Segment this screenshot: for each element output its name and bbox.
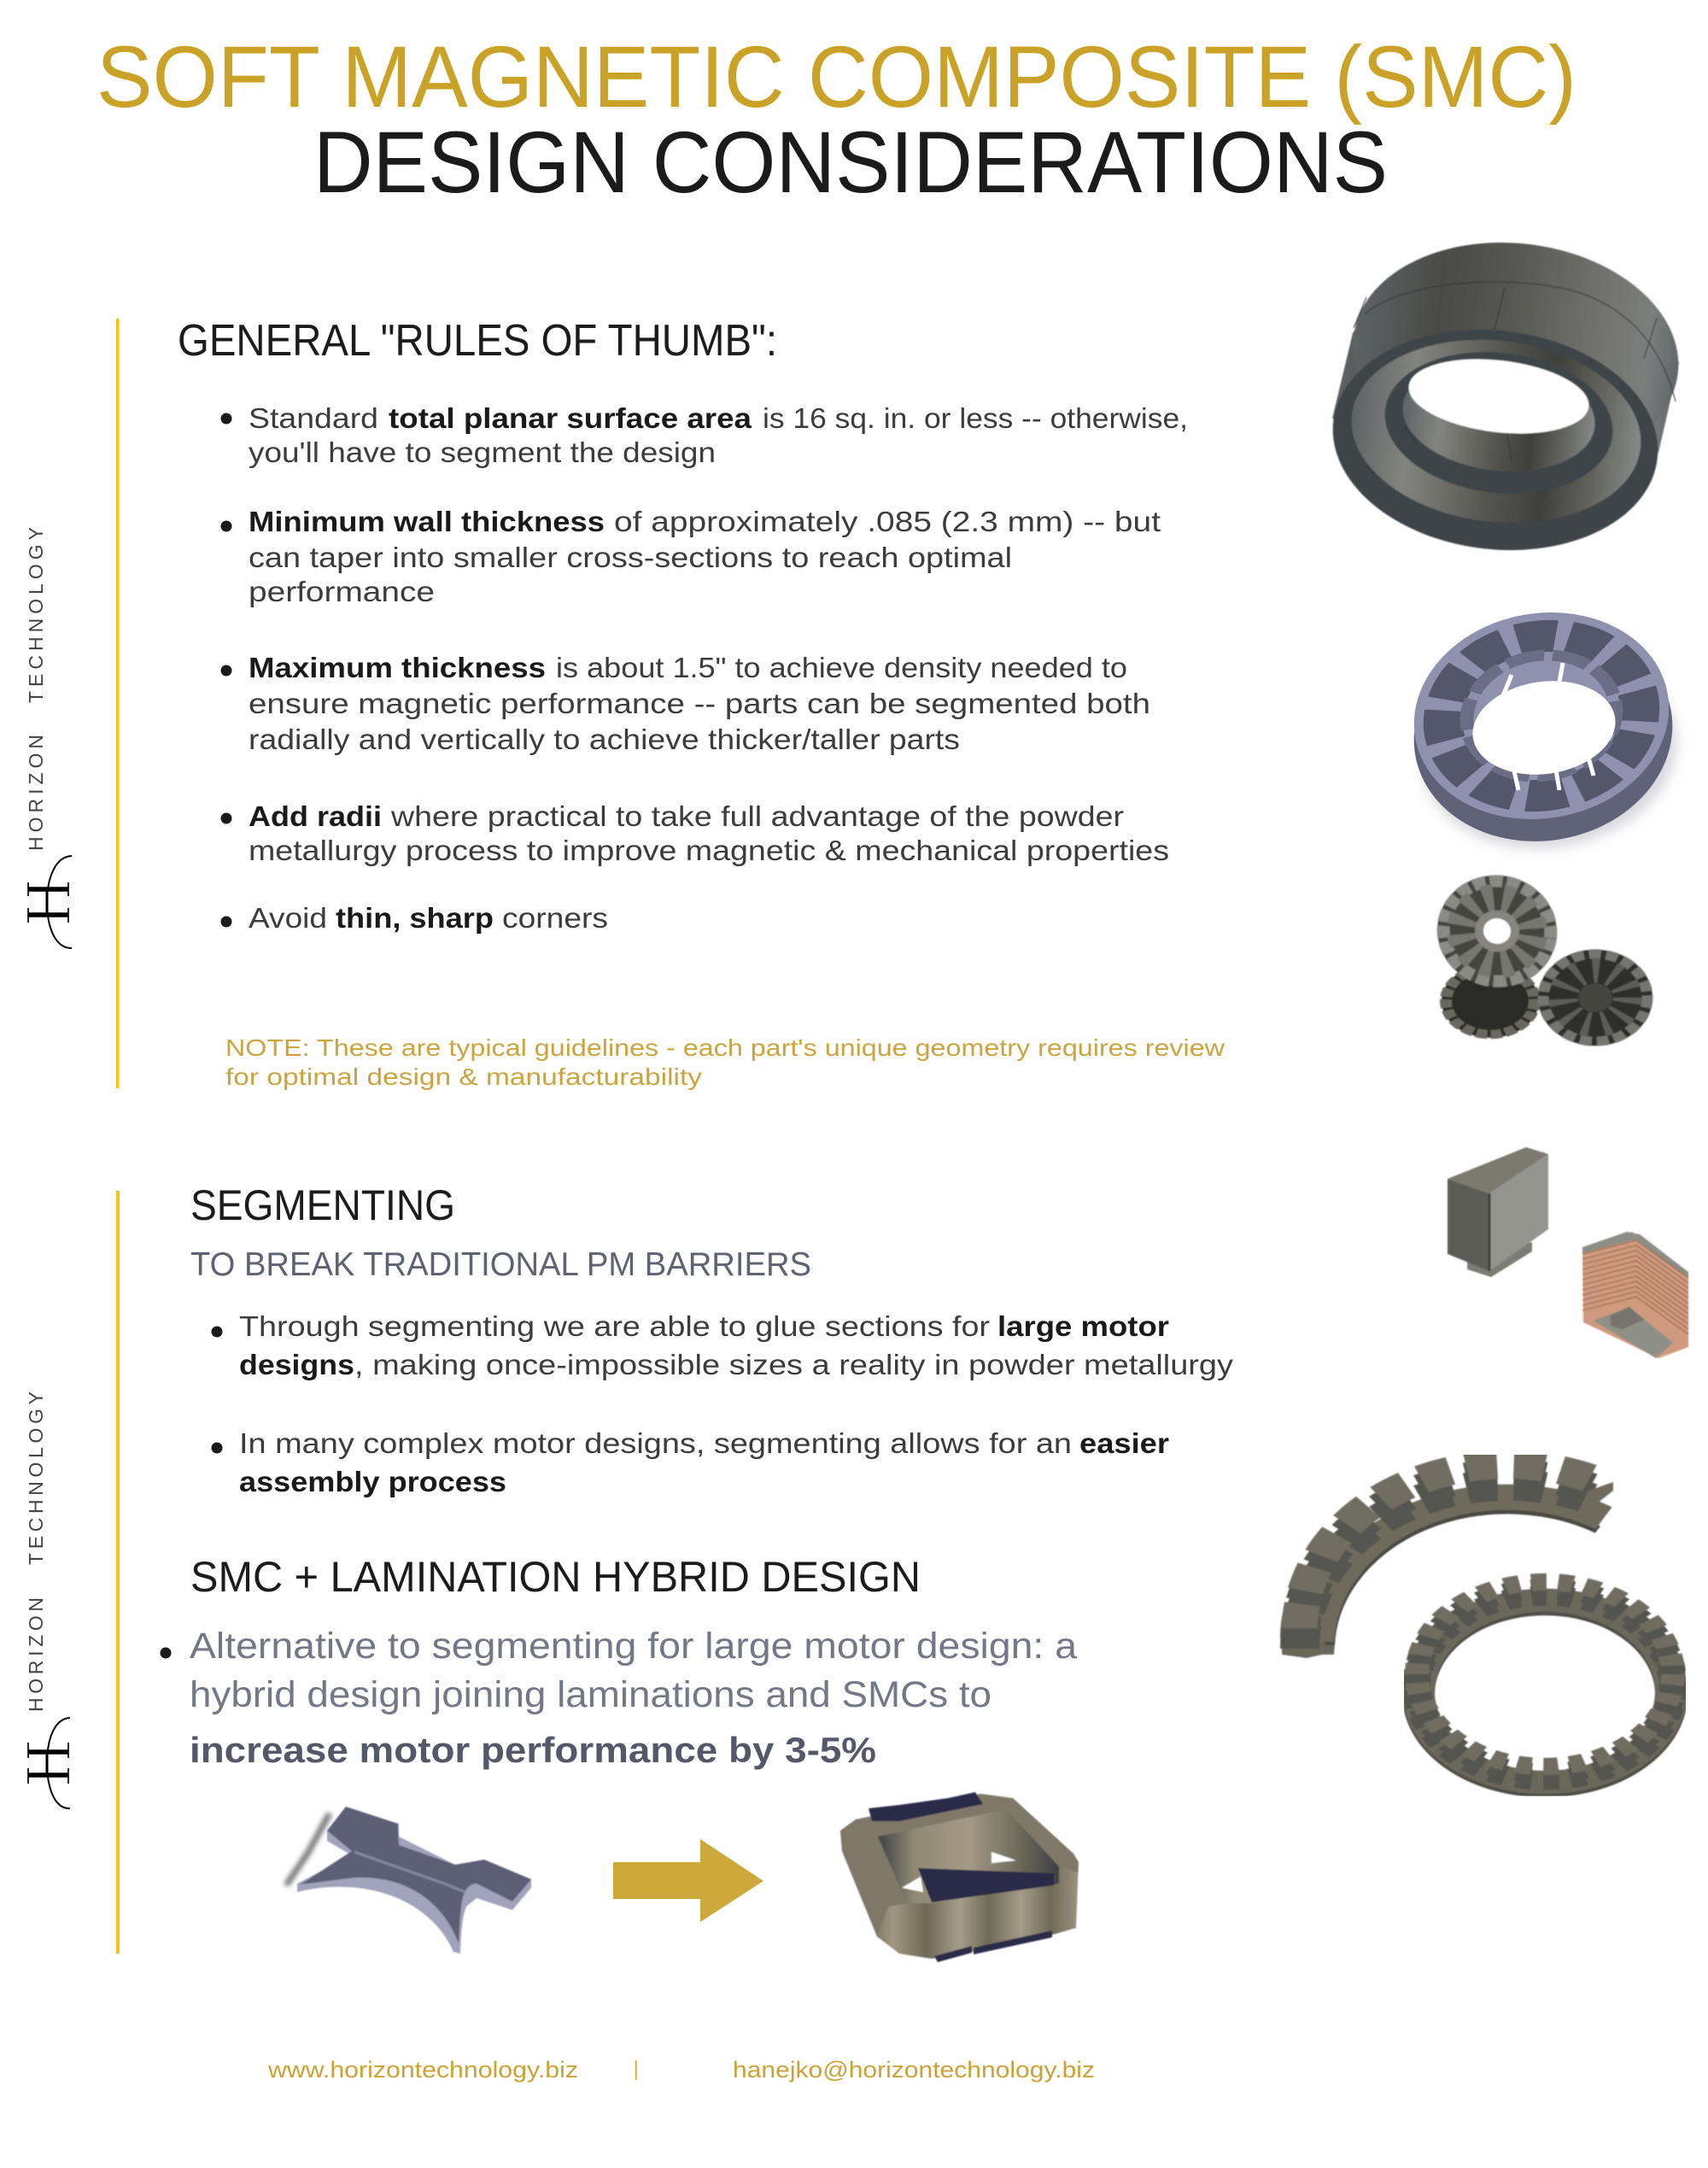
panel: segmenting bbox=[190, 1181, 1234, 1497]
side logo: upper: HORIZON bbox=[25, 735, 47, 851]
title bbox=[97, 28, 1576, 211]
bullet: large motor designs bbox=[212, 1310, 1234, 1380]
bullet: planar surface area: is 16 sq. in. or less -- otherwise, bbox=[763, 402, 1188, 434]
bullet: add radii: Add radii bbox=[249, 800, 382, 832]
frame rim bbox=[840, 1794, 1079, 1937]
top rotor bbox=[1430, 868, 1564, 994]
image: segmented ring bbox=[1321, 226, 1691, 567]
bullet: minimum wall thickness: performance bbox=[249, 576, 435, 607]
bullet: minimum wall thickness bbox=[220, 506, 1161, 607]
image: SMC tooth piece bbox=[286, 1807, 531, 1954]
bullet: minimum wall thickness: of approximately .085 (2.3 mm) -- but bbox=[614, 506, 1161, 537]
bullet: avoid thin sharp corners: Avoid bbox=[249, 902, 327, 934]
title: DESIGN CONSIDERATIONS bbox=[313, 114, 1388, 211]
panel: hybrid design bbox=[161, 1553, 1077, 1770]
title: SOFT MAGNETIC COMPOSITE (SMC) bbox=[97, 28, 1576, 126]
panel: general rules of thumb bbox=[178, 316, 1225, 1090]
side logo: upper bbox=[25, 527, 72, 948]
heading: segmenting: SEGMENTING bbox=[190, 1181, 455, 1229]
bullet: large motor designs: designs bbox=[239, 1349, 354, 1380]
bullet: planar surface area: you'll have to segment the design bbox=[249, 437, 716, 468]
bullet: maximum thickness: radially and vertically to achieve thicker/taller parts bbox=[249, 724, 960, 755]
clamp top bbox=[869, 1792, 983, 1821]
bullet: maximum thickness: is about 1.5" to achieve density needed to bbox=[556, 652, 1127, 683]
image: copper coil bbox=[1582, 1232, 1688, 1358]
right rotor bbox=[1538, 950, 1652, 1046]
bullet: minimum wall thickness: Minimum wall thickness bbox=[249, 506, 605, 537]
bullet: easier assembly: assembly process bbox=[239, 1466, 506, 1497]
bullet: easier assembly: easier bbox=[1079, 1427, 1169, 1459]
bullet: easier assembly bbox=[212, 1427, 1169, 1497]
bullet: avoid thin sharp corners: thin, sharp bbox=[336, 902, 494, 934]
bullet: planar surface area bbox=[220, 402, 1188, 468]
bullet: add radii: where practical to take full advantage of the powder bbox=[390, 800, 1124, 832]
image: block segment bbox=[1448, 1147, 1548, 1277]
bullet: add radii bbox=[220, 800, 1169, 866]
footer: hanejko@horizontechnology.biz bbox=[733, 2057, 1095, 2083]
bullet: alternative to segmenting: Alternative to segmenting for large motor design: a bbox=[190, 1626, 1077, 1667]
subheading: TO BREAK TRADITIONAL PM BARRIERS bbox=[190, 1246, 811, 1283]
image: hybrid stator assembly bbox=[840, 1792, 1079, 1962]
side logo: upper: TECHNOLOGY bbox=[25, 527, 47, 703]
side logo: lower bbox=[25, 1392, 70, 1808]
arrow bbox=[613, 1839, 763, 1922]
image: full tooth ring bbox=[1417, 1582, 1673, 1786]
bullet: maximum thickness bbox=[220, 652, 1150, 755]
bullet: large motor designs: Through segmenting we are able to glue sections for bbox=[239, 1310, 990, 1342]
bullet: minimum wall thickness: can taper into smaller cross-sections to reach optimal bbox=[249, 542, 1012, 573]
side logo: lower: TECHNOLOGY bbox=[25, 1392, 47, 1565]
bullet: alternative to segmenting bbox=[161, 1626, 1077, 1770]
note bbox=[225, 1034, 1225, 1090]
frame window bbox=[878, 1809, 1059, 1903]
lower left rotor bbox=[1442, 964, 1539, 1038]
side logo: lower: HORIZON bbox=[25, 1597, 47, 1712]
footer bbox=[267, 2057, 1095, 2083]
footer: www.horizontechnology.biz bbox=[267, 2057, 578, 2083]
image: stator ring with pockets bbox=[1396, 593, 1693, 868]
bullet: alternative to segmenting: increase motor performance by 3-5% bbox=[190, 1730, 876, 1770]
bullet: planar surface area: total planar surface area bbox=[389, 402, 752, 434]
accent bar: upper bbox=[116, 319, 120, 1088]
heading: rules of thumb: GENERAL "RULES OF THUMB": bbox=[178, 316, 777, 366]
bullet: add radii: metallurgy process to improve magnetic & mechanical properties bbox=[249, 835, 1169, 866]
bullet: avoid thin sharp corners: corners bbox=[502, 902, 608, 934]
bullet: easier assembly: In many complex motor designs, segmenting allows for an bbox=[239, 1427, 1072, 1459]
bullet: avoid thin sharp corners bbox=[220, 902, 608, 934]
bullet: maximum thickness: Maximum thickness bbox=[249, 652, 546, 683]
clamp centre bbox=[918, 1868, 1054, 1902]
bullet: maximum thickness: ensure magnetic performance -- parts can be segmented both bbox=[249, 688, 1150, 719]
note: for optimal design & manufacturability bbox=[225, 1063, 702, 1090]
heading: hybrid design: SMC + LAMINATION HYBRID DESIGN bbox=[190, 1553, 921, 1601]
accent bar: lower bbox=[116, 1191, 120, 1954]
bullet: alternative to segmenting: hybrid design joining laminations and SMCs to bbox=[190, 1674, 991, 1715]
image: segmented tooth arc bbox=[1282, 1465, 1613, 1658]
note: NOTE: These are typical guidelines - each part's unique geometry requires review bbox=[225, 1034, 1225, 1061]
bullet: large motor designs: , making once-impossible sizes a reality in powder metallurgy bbox=[354, 1349, 1234, 1380]
image: rotor cores bbox=[1430, 868, 1652, 1046]
bullet: large motor designs: large motor bbox=[997, 1310, 1169, 1342]
bullet: planar surface area: Standard bbox=[249, 402, 378, 434]
